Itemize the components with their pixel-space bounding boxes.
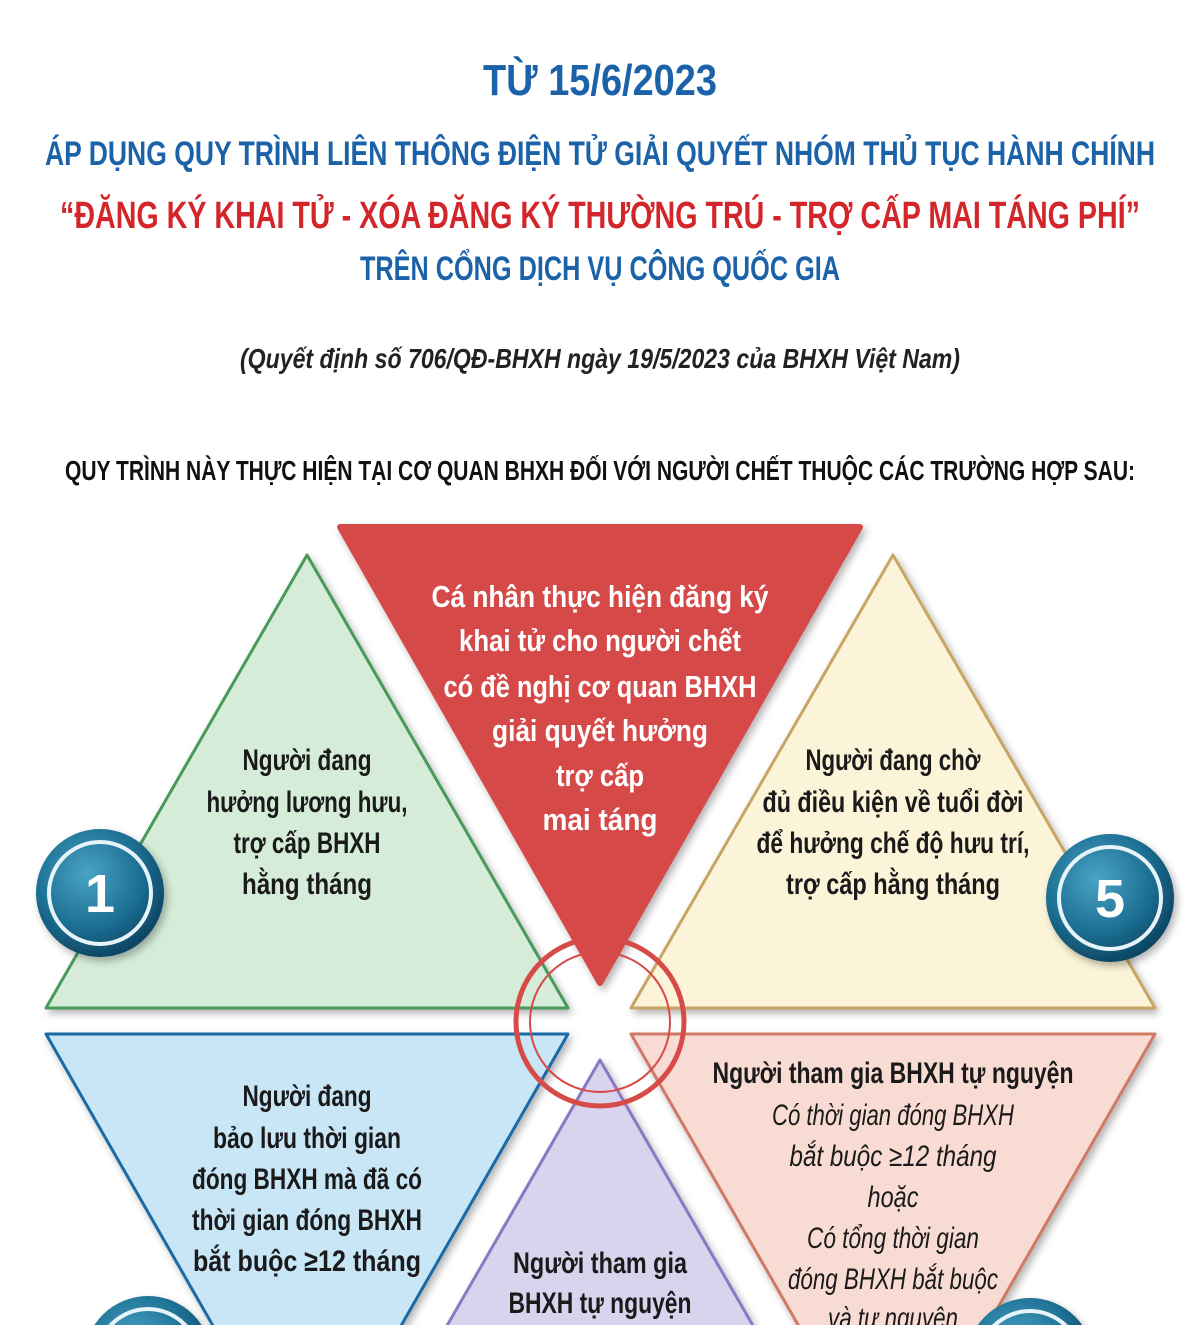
panel: pink case: hoặc — [868, 1181, 918, 1214]
panel: green case 1: hưởng lương hưu, — [206, 786, 408, 819]
panel: yellow case 5: đủ điều kiện về tuổi đời — [762, 786, 1024, 819]
panel: pink case: Có thời gian đóng BHXH — [772, 1099, 1014, 1132]
panel: blue case — [46, 1034, 568, 1325]
badge 5: 5 — [1095, 869, 1125, 929]
panel: green case 1: trợ cấp BHXH — [234, 827, 380, 860]
panel: blue case: bắt buộc ≥12 tháng — [193, 1244, 421, 1278]
panel: pink case — [631, 1034, 1155, 1325]
panel: yellow case 5 — [631, 555, 1155, 1008]
panel: red center case: Cá nhân thực hiện đăng ký — [432, 579, 769, 614]
panel: purple case — [338, 1060, 862, 1325]
title: date: TỪ 15/6/2023 — [483, 55, 717, 105]
panel: blue case: thời gian đóng BHXH — [192, 1204, 422, 1237]
panel: purple case: Người tham gia — [513, 1247, 687, 1280]
badge 1 — [36, 829, 164, 957]
badge 1: 1 — [85, 864, 115, 924]
center rings — [516, 938, 684, 1106]
panel: red center case: khai tử cho người chết — [459, 623, 741, 658]
panel: pink case: Có tổng thời gian — [807, 1222, 979, 1255]
panel: red center case: giải quyết hưởng — [492, 713, 708, 748]
panel: pink case: Người tham gia BHXH tự nguyện — [712, 1057, 1074, 1090]
panel: red center case: trợ cấp — [556, 758, 644, 793]
panel: pink case: bắt buộc ≥12 tháng — [790, 1140, 997, 1173]
panel: green case 1 — [46, 555, 568, 1008]
panel: green case 1: Người đang — [242, 744, 372, 777]
panel: blue case: Người đang — [242, 1080, 372, 1113]
badge bottom right — [966, 1298, 1094, 1325]
panel: yellow case 5: để hưởng chế độ hưu trí, — [756, 827, 1030, 860]
subtitle: decision: (Quyết định số 706/QĐ-BHXH ngày 19/5/2023 của BHXH Việt Nam) — [240, 343, 960, 374]
panel: yellow case 5: trợ cấp hằng tháng — [786, 867, 1000, 901]
panel: blue case: bảo lưu thời gian — [213, 1122, 401, 1155]
panel: blue case: đóng BHXH mà đã có — [192, 1163, 422, 1196]
panel: green case 1: hằng tháng — [242, 867, 372, 901]
badge bottom left — [84, 1296, 212, 1325]
panel: red center case — [340, 527, 860, 983]
panel: red center case: mai táng — [542, 802, 658, 837]
panel: pink case: đóng BHXH bắt buộc — [788, 1263, 998, 1296]
badge 5 — [1046, 834, 1174, 962]
panel: red center case: có đề nghị cơ quan BHXH — [444, 669, 756, 704]
title: line 4: TRÊN CỔNG DỊCH VỤ CÔNG QUỐC GIA — [360, 249, 840, 288]
panel: purple case: BHXH tự nguyện — [508, 1287, 692, 1320]
panel: yellow case 5: Người đang chờ — [806, 744, 981, 777]
